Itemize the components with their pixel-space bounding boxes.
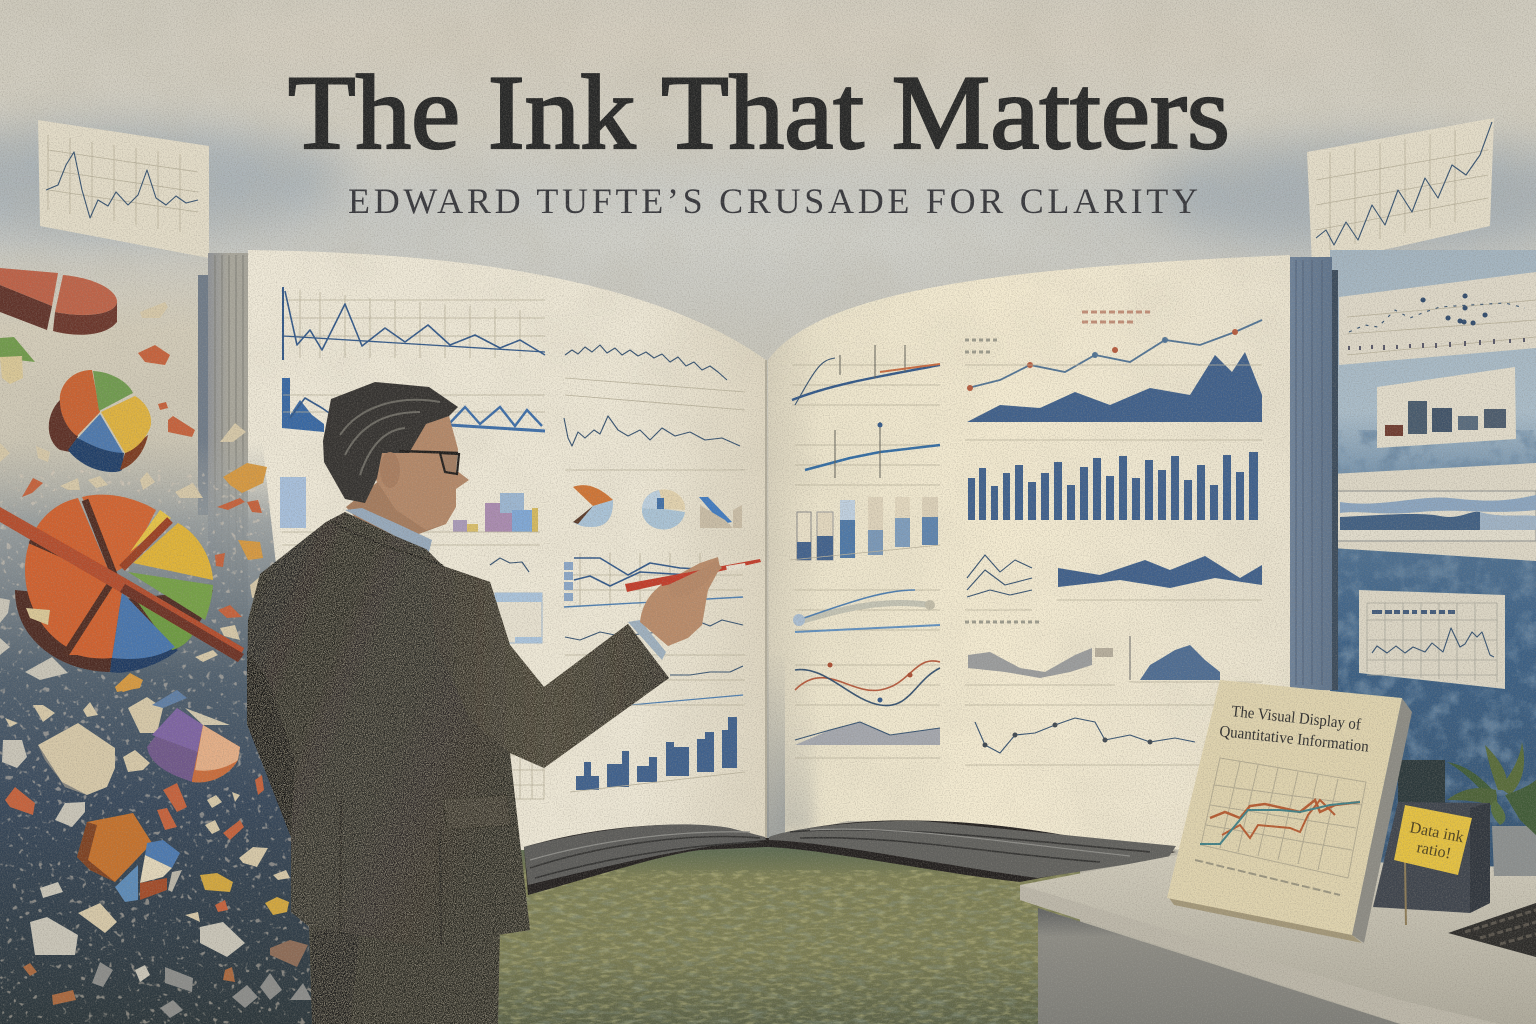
left page	[248, 250, 766, 850]
card: line chart	[1359, 590, 1505, 689]
left rubble field	[0, 268, 320, 1024]
book pages	[1352, 698, 1412, 943]
chart: bars and pies row	[280, 477, 742, 545]
jacket	[247, 512, 669, 947]
pocket flap	[443, 795, 510, 830]
jacket seams and vent	[330, 520, 443, 945]
chart: line with grid	[283, 287, 545, 360]
chart: line with dots and area	[965, 312, 1262, 440]
chart: trend band	[793, 590, 940, 632]
floating chart card: top left	[38, 120, 209, 258]
cover title: Quantitative Information	[1219, 723, 1370, 756]
book page block and cover	[524, 820, 1176, 895]
sticky note: Data ink	[1408, 819, 1465, 846]
right background: blue foliage wall	[1330, 250, 1536, 900]
rubble fragments	[0, 302, 312, 1018]
cover	[1167, 680, 1402, 935]
cover chart	[1200, 758, 1366, 878]
trousers	[309, 925, 500, 1024]
open book	[198, 250, 1338, 895]
card: dot plot	[1339, 272, 1536, 365]
gutter shadow	[765, 360, 814, 840]
right spine page edges	[1288, 257, 1338, 690]
broken pie: small green fragment	[0, 337, 35, 384]
broken pie: large slashed	[0, 495, 244, 673]
head	[323, 382, 469, 530]
broken pie: top, red brown	[0, 268, 117, 335]
title: The Ink That Matters	[288, 54, 1230, 171]
shirt collar	[345, 508, 432, 552]
left spine page edges	[198, 253, 250, 723]
card: bar chart	[1377, 367, 1516, 448]
dark box behind note	[1373, 802, 1490, 913]
chart: small multiline and area	[965, 555, 1262, 610]
chart: grey and blue band	[965, 622, 1262, 685]
chart: lines with red marks	[792, 345, 940, 405]
neck	[346, 460, 446, 548]
cover caption	[1195, 860, 1340, 895]
red pen	[625, 559, 761, 592]
chart: grey area	[795, 722, 940, 758]
fingers	[668, 560, 722, 598]
broken pie: orange hexagon and fragments	[77, 813, 182, 902]
broken pie: purple	[147, 708, 240, 783]
chart: coloured crossing lines	[795, 661, 940, 706]
ear	[380, 452, 400, 488]
keyboard	[1448, 903, 1536, 957]
chart: scatter line	[795, 422, 940, 485]
slash bar	[0, 507, 244, 662]
desk	[1020, 855, 1536, 1024]
shirt cuff	[628, 620, 666, 660]
man from behind	[247, 382, 761, 1024]
chart: bottom blue bars	[570, 705, 745, 792]
chart: dense lines column	[564, 345, 745, 470]
page mottling	[248, 250, 1290, 850]
jacket body	[247, 512, 669, 947]
left page charts	[280, 287, 745, 799]
right chart cards	[1331, 272, 1536, 689]
chart: blue area lines	[282, 378, 545, 432]
jacket sleeve	[426, 549, 669, 768]
sticky note: ratio!	[1415, 839, 1453, 863]
floating chart card: top right	[1307, 118, 1494, 266]
book on desk	[1167, 680, 1412, 943]
potted plant	[1398, 742, 1536, 876]
chart: stacked bars	[790, 497, 940, 560]
card: area band	[1331, 463, 1536, 561]
hand	[640, 557, 720, 646]
chart: mixed lines	[490, 553, 745, 799]
cover title: The Visual Display of	[1231, 703, 1362, 734]
sticky note	[1394, 805, 1472, 925]
cover title	[1219, 703, 1370, 756]
subtitle: EDWARD TUFTE’S CRUSADE FOR CLARITY	[348, 181, 1198, 221]
right page	[768, 255, 1290, 850]
broken pie: multicolour middle	[49, 370, 151, 472]
glasses	[399, 451, 459, 474]
chart: bottom dotted line	[965, 705, 1215, 765]
chart: long blue bar chart	[968, 452, 1258, 520]
grass lawn	[480, 845, 1080, 1024]
shadow of back arm	[247, 650, 295, 837]
right page charts	[790, 312, 1262, 765]
